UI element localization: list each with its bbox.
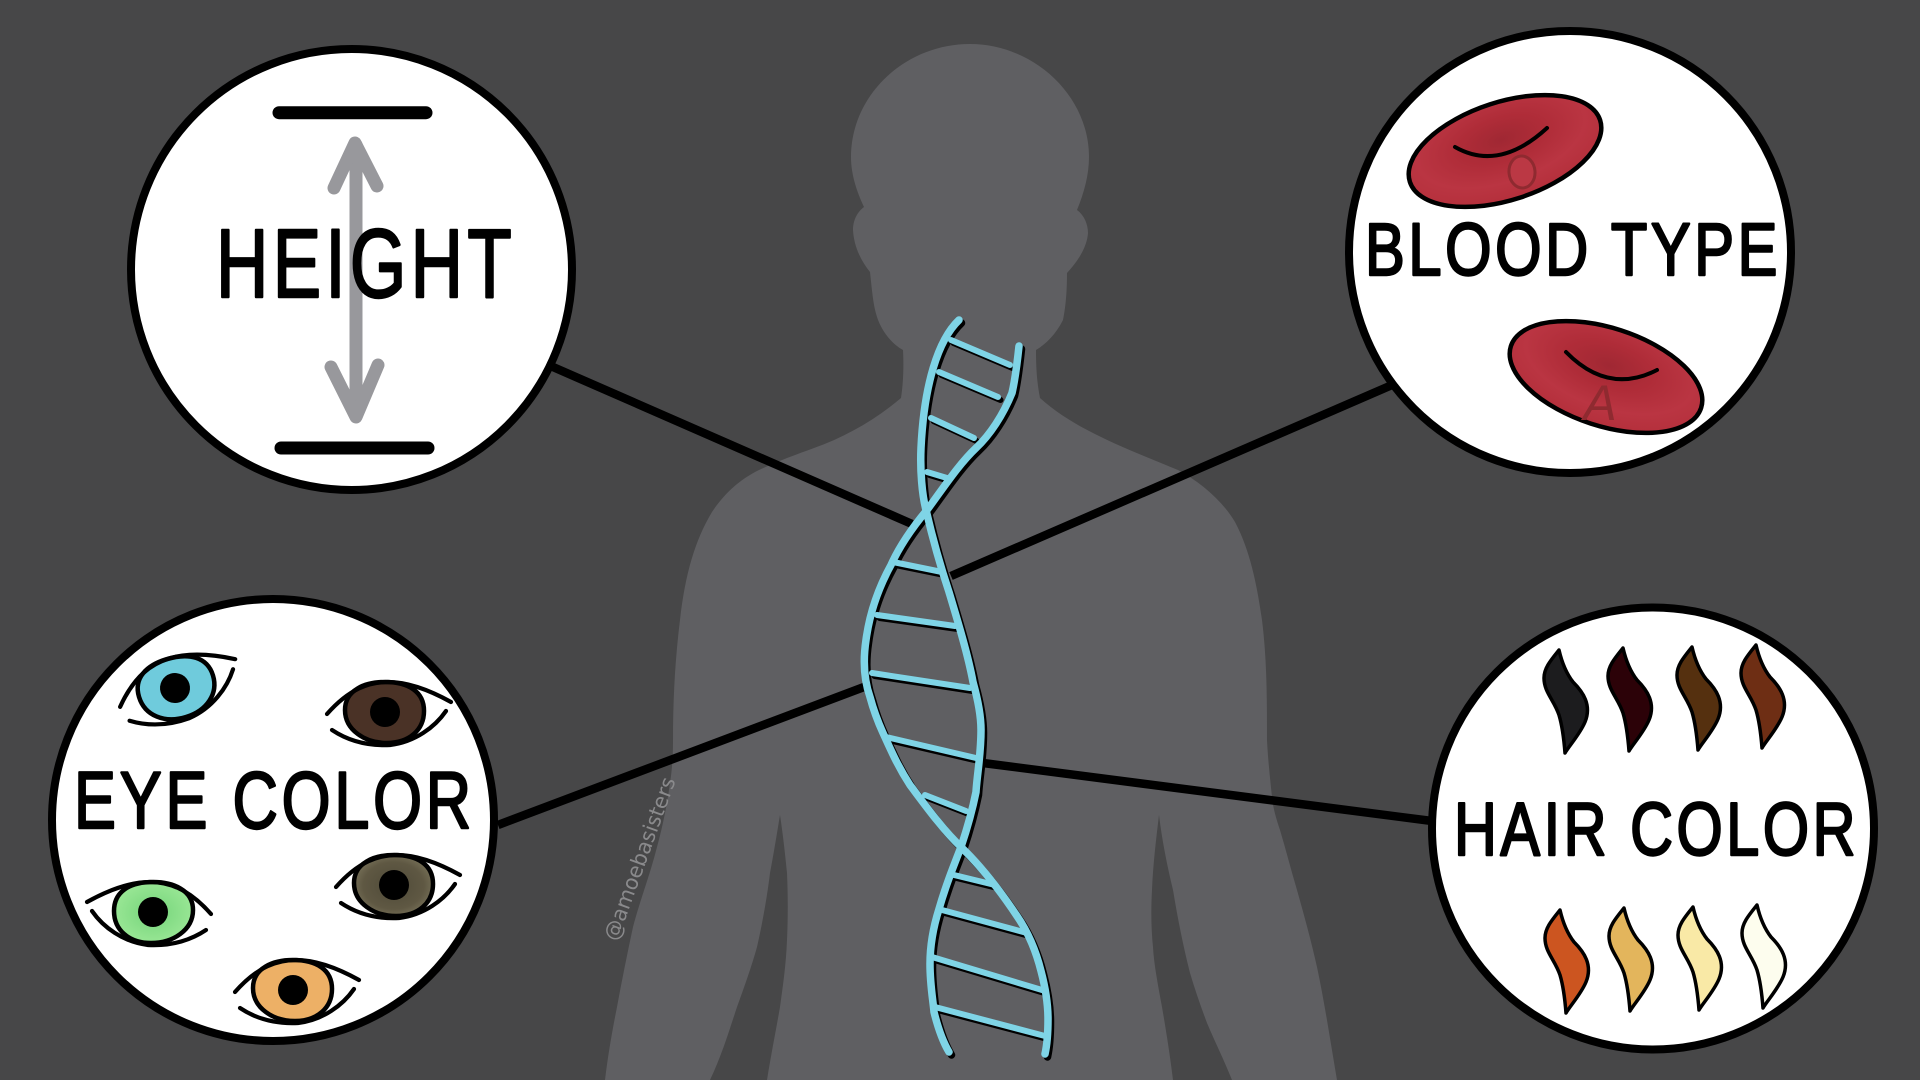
icon: hazel eye [336,855,460,918]
connector line: blood type [951,385,1392,576]
heading: HEIGHT: HEIGHT [216,209,516,318]
heading: EYE COLOR: EYE COLOR [74,756,475,846]
connector line: height [553,367,912,524]
icon: green eye [87,882,211,945]
helix shadow [867,323,1050,1057]
icon: brown eye [327,682,451,745]
panel: blood type [1349,31,1791,473]
connector line: hair color [983,763,1432,821]
arrow: double-headed height arrow [331,143,378,417]
hair swatches: dark row [1544,645,1784,753]
watermark: @amoebasisters [599,774,681,944]
icon: blue eye [111,640,248,737]
bottom limit bar [281,442,428,454]
panel: eye color [52,599,494,1041]
helix strands [864,320,1048,1054]
helix rungs [872,340,1045,1036]
DNA double helix [864,320,1050,1057]
top limit bar [279,106,426,119]
red blood cell A: A [1580,375,1617,431]
connector line: eye color [498,687,864,825]
panel: hair color [1432,608,1874,1050]
icon: amber eye [235,960,359,1023]
human silhouette [605,44,1337,1080]
heading: BLOOD TYPE: BLOOD TYPE [1365,208,1781,291]
red blood cell O [1395,73,1615,229]
red blood cell A [1496,299,1716,455]
panel: height [131,49,572,490]
hair swatches: light row [1545,905,1785,1013]
